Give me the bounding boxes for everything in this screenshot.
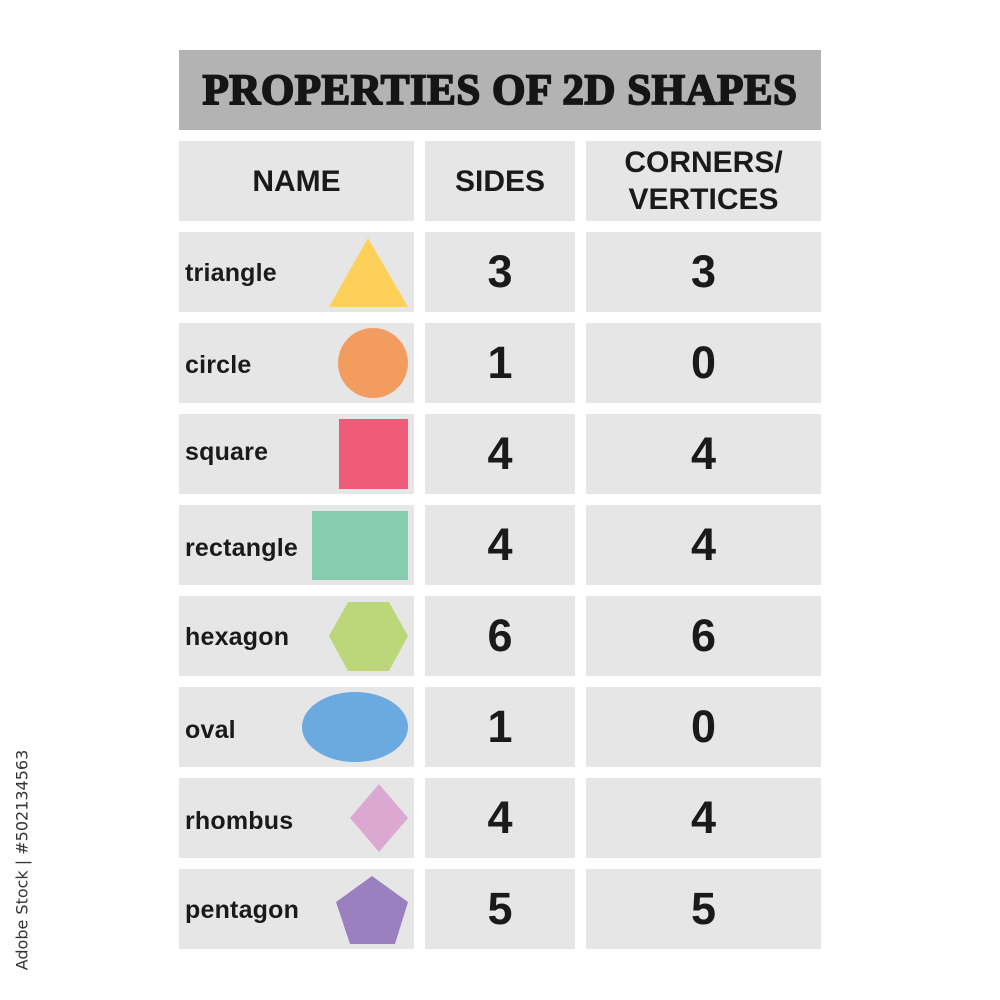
row: rectangle: 4: [487, 519, 513, 570]
shape names: pentagon: [185, 896, 299, 924]
icon: pentagon: [336, 876, 408, 944]
title bar: [179, 50, 821, 130]
row: square: 4: [691, 428, 716, 479]
row: square: [179, 414, 821, 494]
row: circle: [179, 323, 821, 403]
header: corners: CORNERS/: [624, 146, 783, 179]
row: rectangle: 4: [691, 519, 716, 570]
row: square: 4: [487, 428, 513, 479]
header: corners: [586, 141, 821, 221]
shape names: rhombus: [185, 807, 293, 835]
header: corners: VERTICES: [628, 183, 778, 216]
row: rectangle: [179, 505, 821, 585]
header: name: NAME: [252, 164, 341, 198]
row: triangle: [179, 232, 821, 312]
row: hexagon: [179, 596, 821, 676]
row: rhombus: 4: [487, 792, 513, 843]
row: oval: 0: [691, 701, 716, 752]
shape names: square: [185, 438, 268, 466]
icon: square: [339, 419, 408, 489]
shape names: rectangle: [185, 534, 298, 562]
row: hexagon: 6: [691, 610, 716, 661]
shape names: triangle: [185, 259, 277, 287]
header: sides: [425, 141, 575, 221]
icon: circle: [338, 328, 408, 398]
icon: oval: [302, 692, 408, 762]
row: triangle: 3: [487, 246, 513, 297]
icon: hexagon: [329, 602, 408, 671]
header: name: [179, 141, 414, 221]
row: hexagon: 6: [487, 610, 513, 661]
row: circle: 1: [487, 337, 513, 388]
icon: triangle: [329, 238, 408, 307]
header: sides: SIDES: [455, 164, 545, 198]
row: pentagon: 5: [487, 883, 513, 934]
icon: rectangle: [312, 511, 408, 580]
title bar: PROPERTIES OF 2D SHAPES: [203, 66, 797, 114]
shape names: hexagon: [185, 623, 289, 651]
row: oval: 1: [487, 701, 513, 752]
row: pentagon: [179, 869, 821, 949]
row: triangle: 3: [691, 246, 716, 297]
shape names: oval: [185, 716, 236, 744]
row: rhombus: 4: [691, 792, 716, 843]
row: rhombus: [179, 778, 821, 858]
row: oval: [179, 687, 821, 767]
shape names: circle: [185, 351, 252, 379]
icon: rhombus: [350, 784, 408, 852]
watermark id: Adobe Stock | #502134563: [12, 750, 32, 970]
row: pentagon: 5: [691, 883, 716, 934]
row: circle: 0: [691, 337, 716, 388]
shape names: [185, 259, 299, 924]
